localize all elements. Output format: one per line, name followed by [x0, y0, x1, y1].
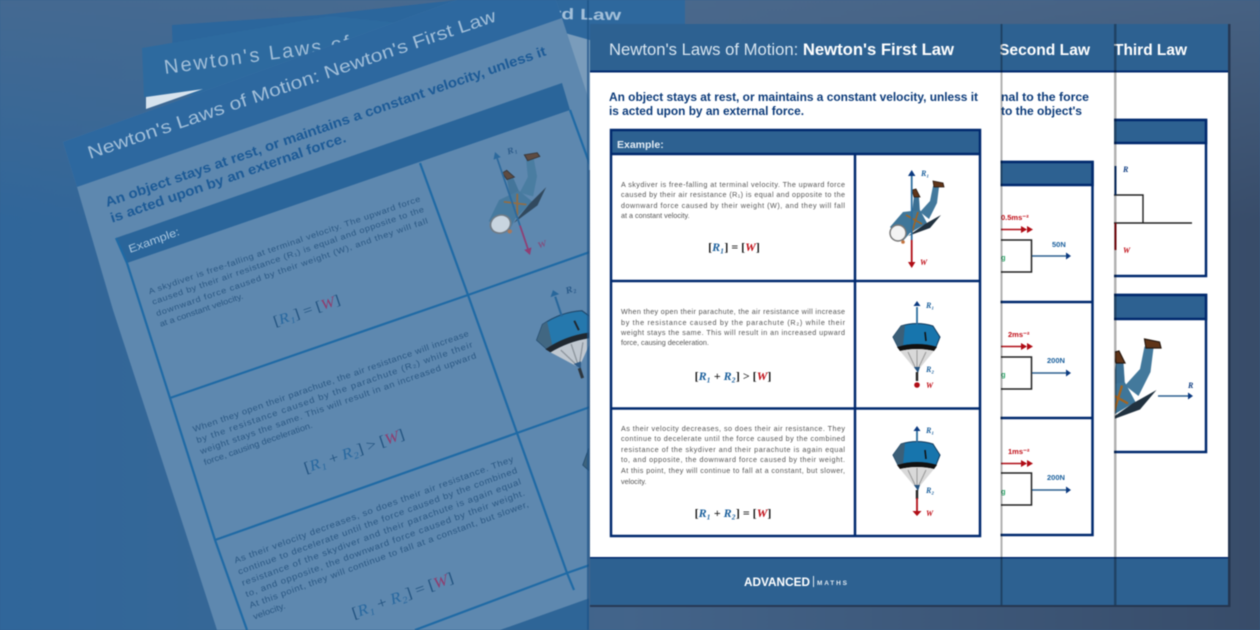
row 2 text: by the resistance caused by the parachute (R₂) while their: [621, 318, 846, 327]
row 3 text: continue to decelerate until the force caused by the combined: [621, 434, 845, 443]
page 1 sheet: [590, 24, 1000, 605]
row 3 icon: parachute with forces: [893, 426, 940, 518]
row 1 text: [621, 180, 845, 220]
row 1 icon: skydiver with forces: [890, 169, 944, 268]
page 3: third law: [590, 24, 1230, 607]
page 2 header: Second Law: [999, 42, 1091, 59]
row 3 icon: parachute with forces: R₂: [925, 486, 934, 495]
page 3 sheet: [1100, 24, 1228, 605]
tilted row 3 text: [235, 457, 529, 620]
page 3 table 1: [1110, 120, 1206, 276]
tilted icon: parachute row 3: [582, 449, 589, 470]
page 3 table 1: W: [1123, 246, 1131, 255]
tilted row 2 text: by the resistance caused by the parachute (R₂) while their: [195, 340, 474, 445]
tilted row 3 text: continue to decelerate until the force caused by the combined: [237, 466, 518, 576]
tilted row 2 text: When they open their parachute, the air resistance will increase: [191, 329, 470, 434]
row 2 icon: parachute with forces: W: [926, 381, 934, 390]
tilted row 3 text: At this point, they will continue to fall at a constant, but slower,: [248, 499, 530, 610]
page 3 header: Third Law: [1114, 42, 1188, 59]
table header: Example:: [617, 139, 664, 151]
page 1: first law: [590, 24, 1000, 605]
page 2 subheading: to the object's: [1001, 104, 1082, 118]
tilted icon: skydiver: R₁: [505, 144, 519, 158]
back page: upper sheet: [172, 0, 560, 120]
tilted page header: [63, 0, 562, 187]
tilted icon: parachute row 2: R₂: [563, 283, 578, 297]
page 3 table 2: [1113, 292, 1208, 454]
diagram row 1: 0.5ms⁻²: [1001, 213, 1029, 222]
subheading: is acted upon by an external force.: [609, 104, 804, 118]
diagram row 1: 50N: [1052, 240, 1066, 249]
force arrow R: [1114, 166, 1116, 195]
back page: third law sheet: rd Law: [553, 6, 622, 24]
row 2 icon: parachute with forces: R₁: [925, 301, 934, 310]
back page: lower sheet edge: [187, 530, 240, 630]
subheading: An object stays at rest, or maintains a constant velocity, unless it: [609, 90, 978, 104]
page 2 subheading: nal to the force: [1001, 90, 1089, 104]
diagram row 1: g: [1001, 253, 1006, 262]
diagram: block on ground: [1110, 195, 1192, 223]
icon: skydiver: [1114, 338, 1162, 419]
row 2 equation: [R₁ + R₂] > [W]: [695, 369, 771, 383]
page 2 subheading: [1001, 90, 1089, 118]
diagram row 1: [1001, 213, 1071, 272]
subheading: [609, 90, 978, 118]
page 3 table 2: R: [1187, 381, 1194, 390]
row 3 icon: parachute with forces: W: [926, 509, 934, 518]
table grid: [611, 130, 980, 536]
page 2 edge line: [1000, 24, 1002, 605]
tilted page body: [63, 0, 590, 630]
row 3 icon: parachute with forces: R₁: [925, 426, 934, 435]
diagram row 2: [1001, 330, 1071, 389]
tilted row 3 text: As their velocity decreases, so does their air resistance. They: [233, 454, 515, 565]
diagram row 2: g: [1001, 370, 1006, 379]
page 3 edge line: [1114, 24, 1116, 605]
tilted row 3 text: to, and opposite, the downward force caused by their weight.: [244, 488, 526, 599]
page 3 header: [1100, 24, 1228, 72]
diagram row 3: [1001, 447, 1071, 505]
back page: third law sheet: [550, 0, 685, 170]
tilted subheading: An object stays at rest, or maintains a constant velocity, unless it: [104, 44, 548, 211]
tilted table header: [116, 83, 570, 263]
row 1 icon: skydiver with forces: W: [920, 258, 928, 267]
page 2 header: [990, 24, 1114, 72]
row 2 text: force, causing deceleration.: [621, 338, 709, 347]
diagram row 3: g: [1001, 487, 1006, 496]
force arrow W: [1114, 223, 1116, 250]
page 2 sheet: [990, 24, 1114, 605]
page 2 footer: [990, 557, 1114, 605]
row 3 text: [621, 424, 845, 486]
title: Newton's Laws of Motion: Newton's First Law: [609, 40, 955, 59]
row 2 text: When they open their parachute, the air resistance will increase: [621, 307, 845, 316]
diagram row 3: 1ms⁻²: [1008, 447, 1030, 456]
tilted front sheet: [64, 0, 590, 630]
row 3 text: As their velocity decreases, so does their air resistance. They: [621, 424, 845, 433]
tilted subheading: is acted upon by an external force.: [109, 131, 348, 226]
force arrow: [1158, 395, 1190, 397]
page 3 footer: [1100, 557, 1228, 605]
front page edge shadow: [587, 0, 589, 630]
tilted row 2 text: [R₁ + R₂] > [W]: [302, 427, 407, 477]
page 2: second law: [990, 24, 1114, 605]
diagram row 3: 200N: [1047, 473, 1065, 482]
tilted table: [114, 82, 590, 630]
back page: middle sheet: [142, 16, 470, 109]
tilted row 1 text: at a constant velocity.: [158, 291, 244, 329]
row 2 icon: parachute with forces: [893, 301, 940, 390]
tilted icon: parachute row 2: [536, 286, 590, 379]
row 1 text: at a constant velocity.: [621, 211, 690, 220]
tilted row 3 text: velocity.: [252, 601, 287, 621]
page 1 footer: [590, 557, 1000, 605]
row 1 text: A skydiver is free-falling at terminal velocity. The upward force: [621, 180, 845, 189]
row 3 text: At this point, they will continue to fall at a constant, but slower,: [621, 466, 845, 475]
logo: MATHS: [817, 580, 848, 587]
row 2 text: weight stays the same. This will result in an increased upward: [620, 328, 845, 337]
tilted row 2 text: weight stays the same. This will result in an increased upward: [198, 351, 477, 456]
row 2 text: [620, 307, 846, 347]
page 1 header: [590, 24, 1000, 72]
back page: middle sheet: Newton's Laws of: [163, 32, 351, 79]
tilted row 3 text: [R₁ + R₂] = [W]: [349, 568, 456, 622]
tilted footer: [500, 598, 590, 630]
row 2 icon: parachute with forces: R₂: [925, 365, 934, 374]
tilted row 1 text: caused by their air resistance (R₁) is equal and opposite to the: [151, 204, 425, 306]
tilted row 1 text: A skydiver is free-falling at terminal velocity. The upward force: [147, 194, 422, 296]
tilted row 1 text: [R₁] = [W]: [271, 292, 342, 330]
tilted icon: skydiver: [489, 147, 546, 255]
row 1 text: downward force caused by their weight (W), and they will fall: [621, 201, 845, 210]
logo: [744, 576, 848, 589]
logo: ADVANCED: [744, 577, 810, 589]
row 3 text: velocity.: [621, 477, 646, 486]
tilted row 1 text: downward force caused by their weight (W), and they will fall: [155, 216, 429, 318]
table header: [611, 130, 980, 154]
example table: [611, 130, 980, 536]
row 3 text: to, and opposite, the downward force caused by their weight.: [621, 455, 845, 464]
tilted page header: Newton's Laws of Motion: Newton's First Law: [85, 6, 499, 163]
row 1 equation: [R₁] = [W]: [708, 240, 760, 254]
tilted row 2 text: force, causing deceleration.: [203, 420, 314, 467]
row 1 icon: skydiver with forces: R₁: [920, 169, 929, 178]
row 3 text: resistance of the skydiver and their parachute is again equal: [621, 445, 845, 454]
page 2 table: [990, 162, 1092, 535]
tilted table grid: [116, 110, 590, 630]
page 3 shadow: [590, 24, 1230, 607]
tilted table header: Example:: [127, 225, 181, 256]
tilted icon: skydiver: W: [536, 238, 550, 251]
diagram row 2: 2ms⁻²: [1008, 330, 1030, 339]
page 3 table 1: R: [1122, 165, 1129, 174]
diagram row 2: 200N: [1047, 356, 1065, 365]
tilted row 3 text: resistance of the skydiver and their parachute is again equal: [240, 477, 522, 588]
row 3 equation: [R₁ + R₂] = [W]: [695, 506, 771, 520]
row 1 text: caused by their air resistance (R₁) is equal and opposite to the: [621, 190, 845, 199]
